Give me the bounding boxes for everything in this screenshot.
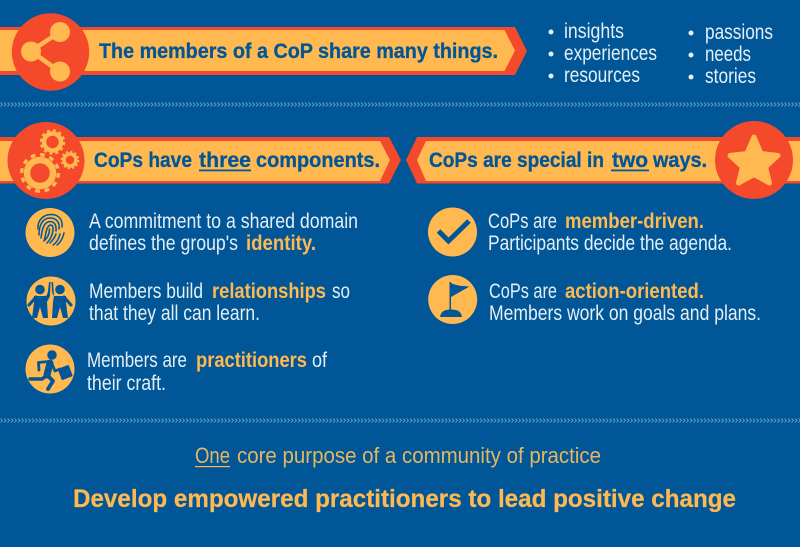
text: practitioners: practitioners (196, 349, 307, 372)
banner heading: members: The members of a CoP share many things. (99, 39, 498, 63)
text: action-oriented: action-oriented. (565, 280, 704, 303)
text: identity: defines the group's (89, 232, 238, 255)
list: shared things, column one: experiences (564, 42, 657, 65)
core purpose line: One (195, 443, 230, 468)
list: shared things, column one: resources (564, 64, 640, 87)
text: identity: identity. (246, 232, 316, 255)
list: shared things, column two (688, 21, 773, 88)
icon: running person with briefcase (30, 350, 72, 389)
banner heading: components (94, 148, 380, 172)
item: practitioners (26, 344, 327, 395)
closing statement: Develop empowered practitioners to lead positive change (73, 485, 736, 513)
icon: two people (29, 282, 71, 318)
icon: check mark (438, 221, 469, 241)
text: relationships: so (332, 280, 350, 303)
text: action-oriented (489, 280, 761, 325)
text: member-driven: member-driven. (565, 210, 704, 233)
icon: gears (22, 130, 78, 191)
list: shared things, column one: insights (564, 20, 624, 43)
banner heading: components: three (199, 148, 251, 172)
text: member-driven (488, 210, 732, 255)
banner heading: two ways: CoPs are special in (429, 148, 604, 172)
text: practitioners (87, 349, 327, 395)
text: relationships (89, 280, 350, 325)
banner: two ways (406, 121, 800, 199)
text: identity (89, 210, 358, 255)
icon: star (730, 137, 778, 183)
text: practitioners: of (312, 349, 327, 372)
item: relationships (26, 276, 350, 326)
core purpose line: core purpose of a community of practice (237, 443, 601, 468)
icon: flag on hill (440, 282, 470, 317)
icon: fingerprint (38, 214, 64, 245)
text: identity: A commitment to a shared domain (89, 210, 358, 233)
text: relationships: that they all can learn. (89, 302, 260, 325)
text: member-driven: Participants decide the agenda. (488, 232, 732, 255)
banner heading: two ways: ways. (652, 148, 707, 172)
item: member-driven (428, 208, 732, 256)
list: shared things, column one (548, 20, 657, 87)
text: member-driven: CoPs are (488, 210, 557, 233)
banner: members share (0, 13, 527, 91)
item: action-oriented (428, 275, 761, 325)
banner heading: components: CoPs have (94, 148, 192, 172)
list: shared things, column two: needs (705, 43, 751, 66)
list: shared things, column two: stories (705, 65, 756, 88)
icon: share (21, 22, 70, 82)
text: practitioners: Members are (87, 349, 187, 372)
text: relationships: Members build (89, 280, 203, 303)
text: relationships: relationships (212, 280, 326, 303)
list: shared things, column two: passions (705, 21, 773, 44)
banner heading: components: components. (256, 148, 380, 172)
text: practitioners: their craft. (87, 372, 166, 395)
banner: three components (0, 122, 401, 199)
text: action-oriented: CoPs are (489, 280, 557, 303)
banner heading: two ways: two (612, 148, 648, 172)
item: identity (26, 208, 358, 257)
